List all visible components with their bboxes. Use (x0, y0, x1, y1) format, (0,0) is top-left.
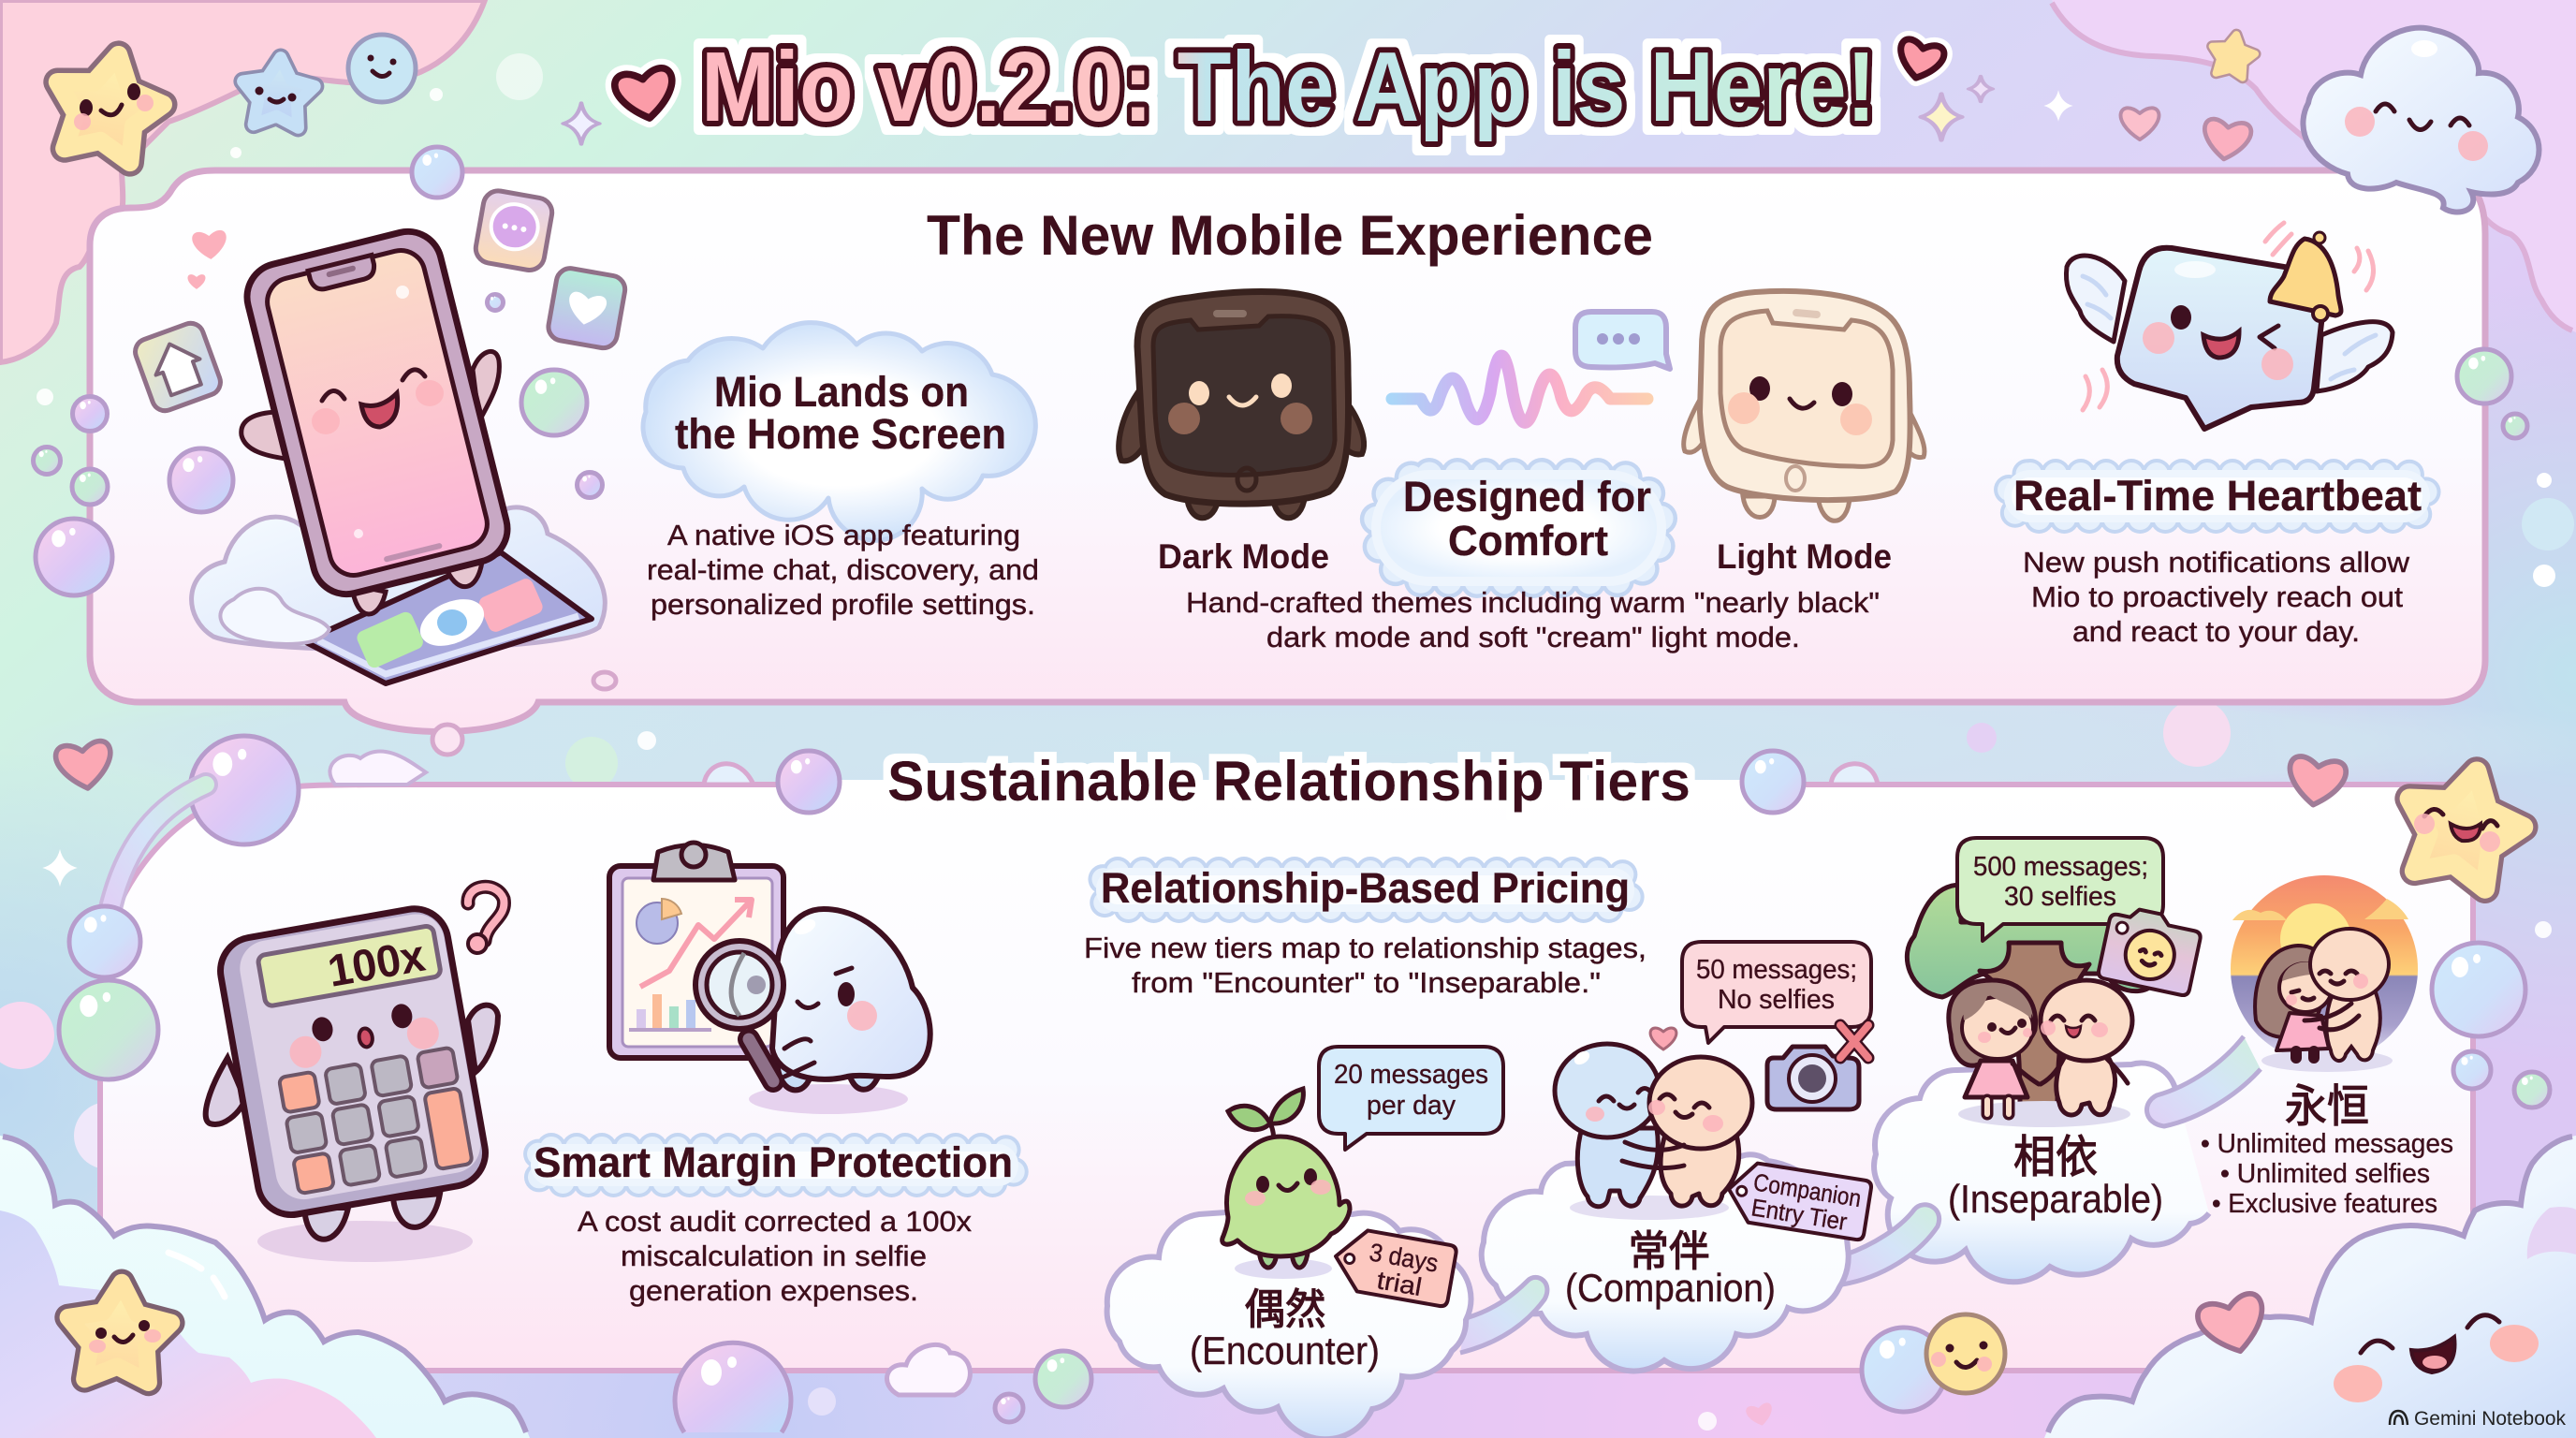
benefits list: • Exclusive features (2212, 1189, 2437, 1219)
hugging characters (1555, 1044, 1752, 1220)
benefits list: • Unlimited selfies (2220, 1159, 2430, 1189)
face: bottom-right cloud (2334, 1315, 2539, 1402)
speech bubble: 500 messages (1957, 838, 2163, 941)
label: companion (1565, 1217, 1776, 1310)
text block: five new tiers: from "Encounter" to "Inseparable." (1132, 966, 1601, 999)
panel: the new mobile experience (90, 170, 2485, 732)
icon: bottom-left star (65, 1280, 173, 1384)
heading: sustainable relationship tiers: Sustainable Relationship Tiers (887, 750, 1690, 813)
tag: 3 days trial (1330, 1225, 1457, 1307)
connector: encounter to companion (1460, 1277, 1547, 1353)
speech bubble: 20 messages: per day (1367, 1091, 1456, 1121)
label: light mode: Light Mode (1717, 537, 1892, 576)
benefits list: • Unlimited messages (2201, 1129, 2453, 1159)
tree (1907, 885, 2149, 1105)
top-right lilac cloud (2052, 0, 2576, 332)
text block: push notifications: New push notifications allow (2023, 546, 2410, 579)
icon: house app (132, 319, 224, 415)
label: encounter: (Encounter) (1190, 1328, 1380, 1372)
icon: small yellow star top right (2207, 31, 2258, 80)
icon: right star with face (2393, 757, 2534, 894)
speech bubble: 50 messages (1682, 942, 1871, 1043)
text block: five new tiers (1084, 932, 1647, 999)
icon: yellow smiley (1926, 1314, 2005, 1393)
illustration: light mode phone character (1684, 291, 1925, 521)
couple under tree (1949, 980, 2132, 1127)
attribution: gemini notebook: Gemini Notebook (2414, 1408, 2566, 1430)
icon: white cloud character (2303, 28, 2539, 213)
text block: hand-crafted themes: Hand-crafted themes including warm "nearly black" (1186, 586, 1880, 619)
text block: push notifications: and react to your day. (2072, 615, 2360, 648)
hugging couple (2255, 929, 2393, 1072)
cloud label: mio lands on the home screen: Mio Lands on (714, 368, 969, 416)
cloud label: designed for comfort (1376, 473, 1661, 581)
text block: native ios app (647, 519, 1039, 621)
heading: the new mobile experience: The New Mobile Experience (927, 204, 1653, 267)
text block: five new tiers: Five new tiers map to relationship stages, (1084, 932, 1647, 964)
tier: companion (1482, 942, 1872, 1371)
icon: pink hearts near phone (187, 229, 228, 289)
tag: 3 days trial: 3 days (1368, 1238, 1441, 1278)
text block: cost audit: miscalculation in selfie (621, 1240, 927, 1272)
text block: native ios app: personalized profile settings. (651, 588, 1035, 621)
text block: native ios app: real-time chat, discovery, and (647, 553, 1039, 586)
label: dark mode: Dark Mode (1158, 537, 1329, 576)
speech bubble: 50 messages: No selfies (1718, 985, 1835, 1015)
tag: 3 days trial: trial (1375, 1266, 1424, 1301)
text block: push notifications: Mio to proactively reach out (2031, 580, 2403, 613)
tier: forever (2201, 875, 2453, 1219)
cloud label: designed for comfort: Designed for (1403, 473, 1651, 521)
icon: small heart (1650, 1028, 1676, 1049)
speech bubble: 500 messages: 30 selfies (2004, 882, 2116, 912)
cloud label: designed for comfort: Comfort (1448, 517, 1608, 565)
icon: blue smiley bubble (348, 35, 416, 102)
cloud label: relationship-based pricing: Relationship-Based Pricing (1101, 864, 1630, 912)
illustration: calculator character (206, 903, 498, 1262)
label: inseparable (1948, 1120, 2163, 1221)
label: encounter (1190, 1275, 1380, 1372)
tier: inseparable (1874, 838, 2209, 1282)
text block: hand-crafted themes: dark mode and soft "cream" light mode. (1266, 621, 1800, 653)
icon: typing bubble (1575, 312, 1670, 369)
cloud label: real-time heartbeat: Real-Time Heartbeat (2013, 472, 2422, 520)
tag: companion entry tier: Companion (1751, 1167, 1863, 1212)
icon: chat app (474, 188, 554, 272)
cloud label: smart margin protection: Smart Margin Protection (534, 1138, 1013, 1186)
speech bubble: 20 messages: 20 messages (1334, 1060, 1488, 1090)
icon: question mark (468, 887, 504, 953)
text block: push notifications (2023, 546, 2410, 648)
icon: title heart right (1895, 37, 1946, 83)
label: encounter: 偶然 (1245, 1275, 1325, 1336)
rainbow arc (110, 785, 206, 908)
speech bubble: 500 messages: 500 messages; (1973, 852, 2148, 882)
panel: sustainable relationship tiers (100, 785, 2473, 1371)
speech bubble: 20 messages (1319, 1047, 1503, 1150)
icon: blue star with face (240, 55, 316, 128)
title: Mio v0.2.0: The App is Here! (701, 32, 1876, 142)
icon: camera with red x (1767, 1025, 1868, 1109)
tag: companion entry tier: Entry Tier (1749, 1193, 1850, 1236)
waveform (1392, 356, 1647, 422)
bottom-left cloud (0, 1136, 530, 1438)
label: inseparable: (Inseparable) (1948, 1177, 2163, 1221)
connector: companion to inseparable (1842, 1205, 1939, 1284)
illustration: blob with magnifier (695, 909, 930, 1114)
sunset circle (2231, 875, 2418, 1063)
illustration: phone character on home screen (192, 225, 605, 683)
bottom-right cloud (2044, 1136, 2576, 1438)
speech bubble: 50 messages: 50 messages; (1696, 955, 1857, 985)
icon: heart app (547, 266, 627, 350)
top-left pink cloud (0, 0, 485, 362)
icon: title heart left (613, 66, 678, 123)
icon: selfie camera (2098, 904, 2203, 996)
cloud label: mio lands on the home screen (643, 323, 1035, 540)
illustration: calculator character: 100x (324, 932, 429, 997)
label: forever: 永恒 (2285, 1069, 2369, 1135)
text block: cost audit (578, 1205, 973, 1307)
illustration: flying bell message character (2066, 223, 2393, 429)
benefits list (2201, 1129, 2453, 1219)
bottom decorations: bubbles and small cloud (675, 1328, 1946, 1432)
text block: cost audit: A cost audit corrected a 100x (578, 1205, 973, 1238)
icon: hearts and sparkle, section two (42, 740, 2348, 887)
text block: native ios app: A native iOS app featuring (667, 519, 1020, 551)
tier: encounter (1107, 1047, 1503, 1438)
icon: heart on bottom-right (2195, 1291, 2272, 1359)
illustration: clipboard chart (609, 843, 783, 1058)
bubbles on left arc (59, 906, 158, 1079)
text block: hand-crafted themes (1186, 586, 1880, 653)
icon: big yellow star with face (44, 44, 171, 167)
label: inseparable: 相依 (2013, 1120, 2098, 1185)
connector: inseparable to forever (2147, 1036, 2261, 1126)
cloud label: mio lands on the home screen: the Home Screen (675, 410, 1006, 458)
tag: companion entry tier (1724, 1160, 1872, 1240)
sparkles and hearts, top (564, 76, 2252, 162)
label: companion: 常伴 (1629, 1217, 1709, 1278)
text block: cost audit: generation expenses. (629, 1274, 918, 1307)
decorative bubbles around panels (34, 147, 2550, 1108)
sprout character (1222, 1089, 1350, 1279)
illustration: dark mode phone character (1119, 292, 1364, 518)
label: companion: (Companion) (1565, 1266, 1776, 1310)
